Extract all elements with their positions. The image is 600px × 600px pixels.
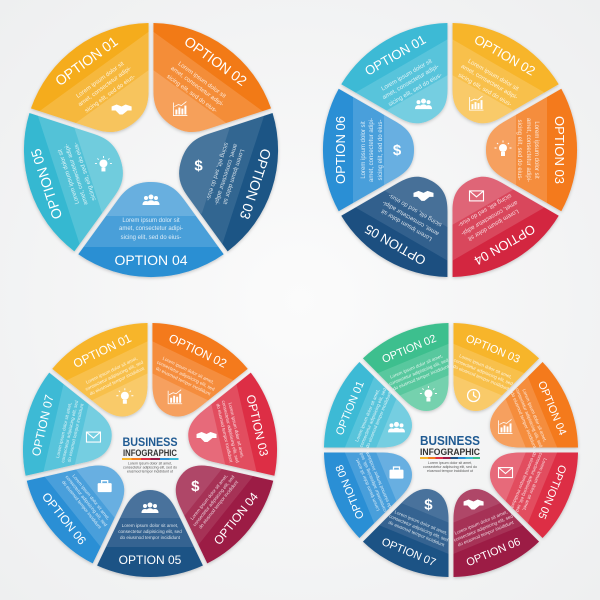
icon: handshake bbox=[414, 191, 434, 201]
body text: Lorem ipsum dolor sit bbox=[381, 58, 434, 92]
text group: do eiusmod tempor incididunt bbox=[120, 535, 181, 540]
body text: do eiusmod tempor incididunt bbox=[510, 391, 538, 449]
body text: do eiusmod tempor incididunt bbox=[364, 451, 392, 509]
segment: option 04 bbox=[488, 362, 580, 450]
text group: consectetur adipisicing elit, sed bbox=[388, 514, 449, 543]
text group: Lorem ipsum dolor sit amet, bbox=[454, 509, 508, 536]
segment: option 06 bbox=[452, 488, 540, 580]
icon: bulb bbox=[420, 386, 437, 401]
title: OPTION 04 bbox=[472, 221, 538, 268]
body text: sicing elit, sed do eius- bbox=[204, 142, 229, 201]
body text: consectetur adipisicing elit, sed bbox=[84, 359, 144, 392]
text group: consectetur adipisicing elit, sed bbox=[192, 474, 236, 527]
icon: people bbox=[415, 99, 432, 109]
icon: envelope bbox=[499, 468, 513, 478]
segment: option 03 bbox=[452, 322, 540, 414]
body text: sicing elit, sed do eius- bbox=[388, 192, 443, 228]
segment: option 06 bbox=[322, 88, 416, 213]
body text: do eiusmod tempor incididunt bbox=[392, 363, 450, 391]
body text: consectetur adipisicing elit, sed bbox=[221, 400, 240, 464]
title: OPTION 03 bbox=[237, 147, 275, 221]
body text: Lorem ipsum dolor sit bbox=[177, 61, 227, 100]
icon: dollar: $ bbox=[424, 497, 433, 514]
body text: Lorem ipsum dolor sit amet, bbox=[85, 356, 138, 385]
icon: people bbox=[388, 422, 405, 432]
title: OPTION 02 bbox=[181, 33, 250, 89]
body text: do eiusmod tempor incididunt bbox=[155, 366, 212, 397]
body text: Lorem ipsum dolor sit amet, bbox=[162, 356, 215, 385]
icon: dollar: $ bbox=[191, 478, 200, 495]
body text: Lorem ipsum dolor sit bbox=[466, 208, 519, 242]
body text: sicing elit, sed do eius- bbox=[516, 120, 522, 180]
segment: option 01 bbox=[340, 22, 449, 126]
body text: sicing elit, sed do eius- bbox=[378, 120, 384, 180]
icon: dollar: $ bbox=[393, 142, 402, 159]
body text: sicing elit, sed do eius- bbox=[457, 72, 512, 108]
body text: Lorem ipsum dolor sit amet, bbox=[55, 402, 72, 458]
segment: option 03 bbox=[484, 88, 578, 213]
segment: option 05 bbox=[488, 452, 580, 540]
body text: amet, consectetur adipi- bbox=[369, 118, 375, 182]
segment: option 03 bbox=[178, 113, 280, 253]
icon: bulb bbox=[95, 156, 112, 171]
body text: Lorem ipsum dolor sit amet, bbox=[521, 388, 548, 443]
center title: 8 options: Lorem ipsum dolor sit amet, bbox=[428, 461, 472, 465]
segment: option 04 bbox=[76, 180, 226, 277]
text group: do eiusmod tempor incididunt bbox=[61, 480, 103, 530]
text group: do eiusmod tempor incididunt bbox=[388, 520, 446, 548]
text group: OPTION 05 bbox=[119, 553, 182, 567]
body text: Lorem ipsum dolor sit bbox=[221, 148, 245, 205]
body text: do eiusmod tempor incididunt bbox=[452, 364, 510, 392]
center title: 8 options: BUSINESS bbox=[420, 433, 480, 448]
text group: OPTION 04 bbox=[211, 490, 261, 547]
center title: 8 options bbox=[420, 433, 480, 473]
body text: sicing elit, sed do eius- bbox=[73, 142, 98, 201]
segment: option 03 bbox=[186, 372, 278, 478]
text group bbox=[187, 470, 262, 548]
title: OPTION 02 bbox=[380, 333, 438, 366]
body text: Lorem ipsum dolor sit amet, bbox=[521, 457, 548, 512]
center title: 7 options: INFOGRAPHIC bbox=[123, 448, 177, 458]
segment: option 02 bbox=[362, 322, 450, 414]
text group: OPTION 06 bbox=[465, 536, 522, 569]
text group bbox=[39, 471, 113, 548]
icon: envelope bbox=[86, 432, 100, 442]
segment: option 04 bbox=[174, 465, 274, 565]
body text: consectetur adipisicing elit, sed bbox=[515, 387, 544, 448]
body text: amet, consectetur adipi- bbox=[169, 66, 225, 108]
body text: do eiusmod tempor incididunt bbox=[66, 402, 85, 463]
body text: Lorem ipsum dolor sit bbox=[380, 207, 433, 241]
title: OPTION 01 bbox=[52, 33, 121, 89]
segment: option 01 bbox=[52, 322, 150, 419]
icon: chart bbox=[173, 102, 187, 116]
body text: amet, consectetur adipi- bbox=[64, 143, 90, 205]
body text: Lorem ipsum dolor sit bbox=[57, 148, 81, 205]
segment: option 07 bbox=[362, 488, 450, 580]
title: OPTION 06 bbox=[333, 116, 348, 184]
segment: option 05 bbox=[340, 176, 449, 280]
body text: consectetur adipisicing elit, sed bbox=[156, 360, 216, 392]
title: OPTION 04 bbox=[535, 379, 568, 437]
center title: 8 options: consectetur adipiscing elit, sed do bbox=[423, 465, 477, 469]
icon: envelope bbox=[470, 191, 484, 201]
body text: do eiusmod tempor incididunt bbox=[215, 403, 234, 463]
body text: consectetur adipisicing elit, sed bbox=[514, 452, 544, 513]
body text: amet, consectetur adipi- bbox=[212, 143, 238, 205]
text group: do eiusmod tempor incididunt bbox=[198, 479, 240, 530]
body text: do eiusmod tempor incididunt bbox=[509, 451, 537, 509]
segment: option 04 bbox=[451, 176, 560, 280]
text group: Lorem ipsum dolor sit bbox=[122, 218, 180, 224]
title: OPTION 03 bbox=[552, 116, 567, 184]
body text: Lorem ipsum dolor sit bbox=[533, 121, 539, 179]
body text: Lorem ipsum dolor sit amet, bbox=[228, 402, 245, 458]
diagram: 6 options bbox=[322, 22, 578, 280]
title: OPTION 02 bbox=[472, 32, 538, 79]
text group bbox=[377, 508, 452, 570]
text group: Lorem ipsum dolor sit amet, bbox=[71, 473, 111, 521]
title: OPTION 01 bbox=[334, 379, 367, 437]
segment: option 05 bbox=[96, 490, 204, 580]
icon: bulb bbox=[494, 140, 512, 156]
segment: option 02 bbox=[451, 22, 560, 126]
icon: bulb bbox=[116, 388, 133, 404]
title: OPTION 01 bbox=[71, 331, 134, 371]
text group: consectetur adipisicing elit, sed bbox=[118, 529, 182, 534]
body text: amet, consectetur adipi- bbox=[382, 64, 440, 101]
center title: 8 options: eiusmod tempor incididunt ut bbox=[427, 469, 473, 473]
text group bbox=[451, 508, 526, 570]
body text: Lorem ipsum dolor sit bbox=[75, 61, 126, 100]
body text: Lorem ipsum dolor sit bbox=[361, 121, 367, 179]
body text: amet, consectetur adipi- bbox=[382, 199, 440, 236]
body text: amet, consectetur adipi- bbox=[460, 64, 518, 101]
body text: sicing elit, sed do eius- bbox=[388, 72, 443, 108]
title: OPTION 08 bbox=[334, 463, 367, 521]
segment: option 07 bbox=[22, 372, 114, 478]
icon: handshake bbox=[197, 432, 217, 442]
icon: chart bbox=[499, 419, 513, 433]
icon: chart bbox=[168, 390, 182, 404]
text group bbox=[114, 218, 188, 268]
text group bbox=[118, 523, 182, 567]
body text: amet, consectetur adipi- bbox=[460, 199, 518, 236]
body text: sicing elit, sed do eius- bbox=[84, 74, 137, 114]
icon: people bbox=[142, 194, 160, 205]
title: OPTION 03 bbox=[464, 333, 522, 366]
body text: amet, consectetur adipi- bbox=[77, 66, 133, 108]
segment: option 01 bbox=[30, 22, 150, 134]
text group: amet, consectetur adipi- bbox=[119, 226, 183, 232]
text group: OPTION 06 bbox=[39, 490, 89, 548]
center title: 7 options: eiusmod tempor incididunt ut bbox=[127, 470, 173, 474]
text group: do eiusmod tempor incididunt bbox=[457, 520, 515, 547]
body text: Lorem ipsum dolor sit amet, bbox=[389, 353, 444, 380]
text group: Lorem ipsum dolor sit amet, bbox=[394, 509, 448, 536]
center title: 7 options bbox=[122, 435, 178, 474]
segment: option 08 bbox=[322, 452, 414, 540]
text group: Lorem ipsum dolor sit amet, bbox=[189, 473, 229, 521]
text group: Lorem ipsum dolor sit amet, bbox=[122, 523, 178, 528]
icon: briefcase bbox=[389, 467, 403, 479]
diagram: 8 options bbox=[322, 322, 580, 580]
title: OPTION 02 bbox=[166, 331, 229, 371]
icon: briefcase bbox=[98, 481, 112, 492]
icon: chart bbox=[470, 96, 484, 110]
body text: consectetur adipisicing elit, sed bbox=[358, 452, 387, 513]
segment: option 02 bbox=[152, 22, 272, 134]
icon: dollar: $ bbox=[194, 157, 203, 174]
title: OPTION 07 bbox=[29, 393, 57, 458]
body text: sicing elit, sed do eius- bbox=[457, 192, 512, 228]
body text: do eiusmod tempor incididunt bbox=[89, 365, 146, 396]
segment: option 01 bbox=[322, 362, 414, 450]
body text: amet, consectetur adipi- bbox=[525, 118, 531, 182]
segment: option 06 bbox=[26, 465, 126, 565]
body text: Lorem ipsum dolor sit bbox=[467, 59, 520, 93]
center title: 7 options: Lorem ipsum dolor sit amet, bbox=[128, 462, 172, 466]
diagram: 7 options bbox=[22, 322, 278, 580]
diagram: 5 options bbox=[22, 22, 280, 280]
body text: consectetur adipisicing elit, sed bbox=[358, 387, 388, 448]
segment: option 02 bbox=[150, 322, 248, 419]
body text: sicing elit, sed do eius- bbox=[165, 74, 218, 114]
segment: option 05 bbox=[22, 113, 124, 253]
title: OPTION 05 bbox=[27, 147, 65, 221]
icon: clock bbox=[468, 389, 480, 401]
body text: Lorem ipsum dolor sit amet, bbox=[354, 388, 381, 443]
body text: do eiusmod tempor incididunt bbox=[365, 391, 393, 449]
icon: people bbox=[142, 502, 158, 513]
body text: Lorem ipsum dolor sit amet, bbox=[354, 457, 381, 512]
text group: consectetur adipisicing elit, sed bbox=[65, 474, 108, 528]
title: OPTION 05 bbox=[535, 463, 568, 521]
body text: consectetur adipisicing elit, sed bbox=[453, 357, 514, 387]
title: OPTION 05 bbox=[362, 221, 428, 268]
body text: consectetur adipisicing elit, sed bbox=[60, 400, 79, 463]
text group: OPTION 04 bbox=[114, 252, 188, 268]
title: OPTION 01 bbox=[362, 32, 428, 79]
icon: handshake bbox=[464, 500, 484, 510]
title: OPTION 03 bbox=[243, 393, 271, 458]
body text: consectetur adipisicing elit, sed bbox=[388, 357, 449, 386]
center title: 7 options: consectetur adipiscing elit, sed do bbox=[123, 466, 177, 470]
center title: 7 options: BUSINESS bbox=[122, 435, 178, 449]
body text: Lorem ipsum dolor sit amet, bbox=[458, 353, 513, 380]
text group: consectetur adipisicing elit, sed bbox=[453, 513, 514, 543]
center title: 8 options: INFOGRAPHIC bbox=[420, 447, 480, 458]
text group: OPTION 07 bbox=[380, 536, 437, 569]
text group: sicing elit, sed do eius- bbox=[121, 235, 181, 241]
icon: handshake bbox=[112, 105, 132, 115]
